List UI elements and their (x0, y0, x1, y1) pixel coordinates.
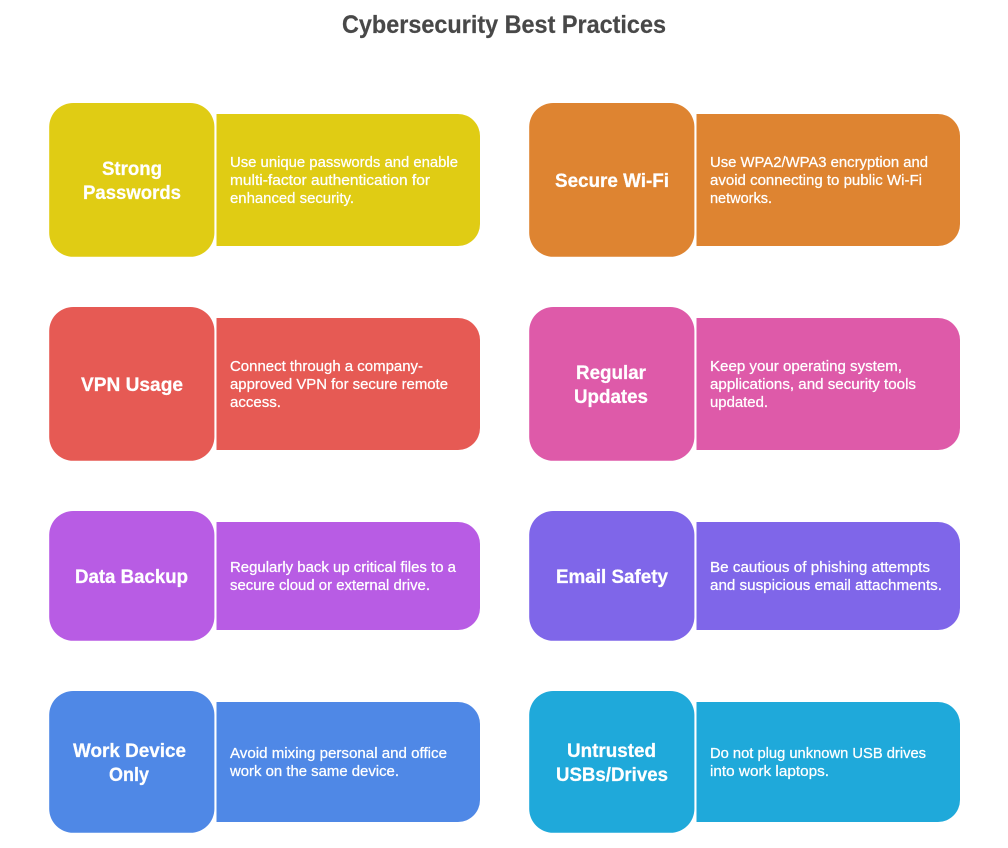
panel: Email Safety: and suspicious email attachments. (710, 578, 942, 594)
panel: Data Backup: secure cloud or external drive. (230, 578, 430, 594)
panel: Work Device Only: work on the same device. (229, 764, 399, 780)
panel: Work Device Only (49, 691, 480, 833)
title: Cybersecurity Best Practices (342, 11, 666, 39)
panel: Untrusted USBs/Drives: into work laptops. (710, 764, 829, 780)
panel: VPN Usage: approved VPN for secure remote (230, 377, 448, 393)
panel: Strong Passwords (49, 103, 480, 257)
panel: Secure Wi-Fi: Secure Wi-Fi (555, 171, 669, 192)
panel: Data Backup: Data Backup (75, 567, 188, 588)
panel: Untrusted USBs/Drives: Untrusted (567, 741, 656, 762)
panel: Regular Updates: applications, and security tools (710, 377, 916, 393)
panel: VPN Usage: VPN Usage (81, 375, 183, 396)
panel: Untrusted USBs/Drives: Do not plug unknown USB drives (710, 746, 926, 762)
panel: VPN Usage (49, 307, 480, 461)
panel: Secure Wi-Fi: avoid connecting to public Wi-Fi (710, 173, 922, 189)
panel: Secure Wi-Fi (529, 103, 960, 257)
panel: Work Device Only: Avoid mixing personal and office (230, 746, 447, 762)
panel: Untrusted USBs/Drives: USBs/Drives (556, 765, 668, 786)
panel: Regular Updates: updated. (710, 395, 768, 411)
panel: Regular Updates: Updates (574, 387, 648, 408)
panel: Secure Wi-Fi: Use WPA2/WPA3 encryption and (710, 155, 928, 171)
panel: Regular Updates (529, 307, 960, 461)
panel: Regular Updates: Regular (576, 363, 647, 384)
panel: Strong Passwords: Strong (102, 159, 162, 180)
panel: Work Device Only: Only (109, 765, 149, 786)
panel: Email Safety (529, 511, 960, 641)
panel: Strong Passwords: enhanced security. (230, 191, 354, 207)
panel: Secure Wi-Fi: networks. (710, 191, 772, 207)
panel: Untrusted USBs/Drives (529, 691, 960, 833)
panel: Regular Updates: Keep your operating system, (710, 359, 902, 375)
panel: Strong Passwords: multi-factor authentication for (230, 173, 430, 189)
panel: Strong Passwords: Use unique passwords and enable (230, 155, 458, 171)
panel: VPN Usage: Connect through a company- (230, 359, 423, 375)
panel: Email Safety: Be cautious of phishing attempts (710, 560, 930, 576)
panel: Data Backup (49, 511, 480, 641)
panel: Email Safety: Email Safety (556, 567, 668, 588)
panel: Data Backup: Regularly back up critical files to a (230, 560, 457, 576)
panel: VPN Usage: access. (230, 395, 281, 411)
panel: Work Device Only: Work Device (73, 741, 186, 762)
panel: Strong Passwords: Passwords (83, 183, 181, 204)
